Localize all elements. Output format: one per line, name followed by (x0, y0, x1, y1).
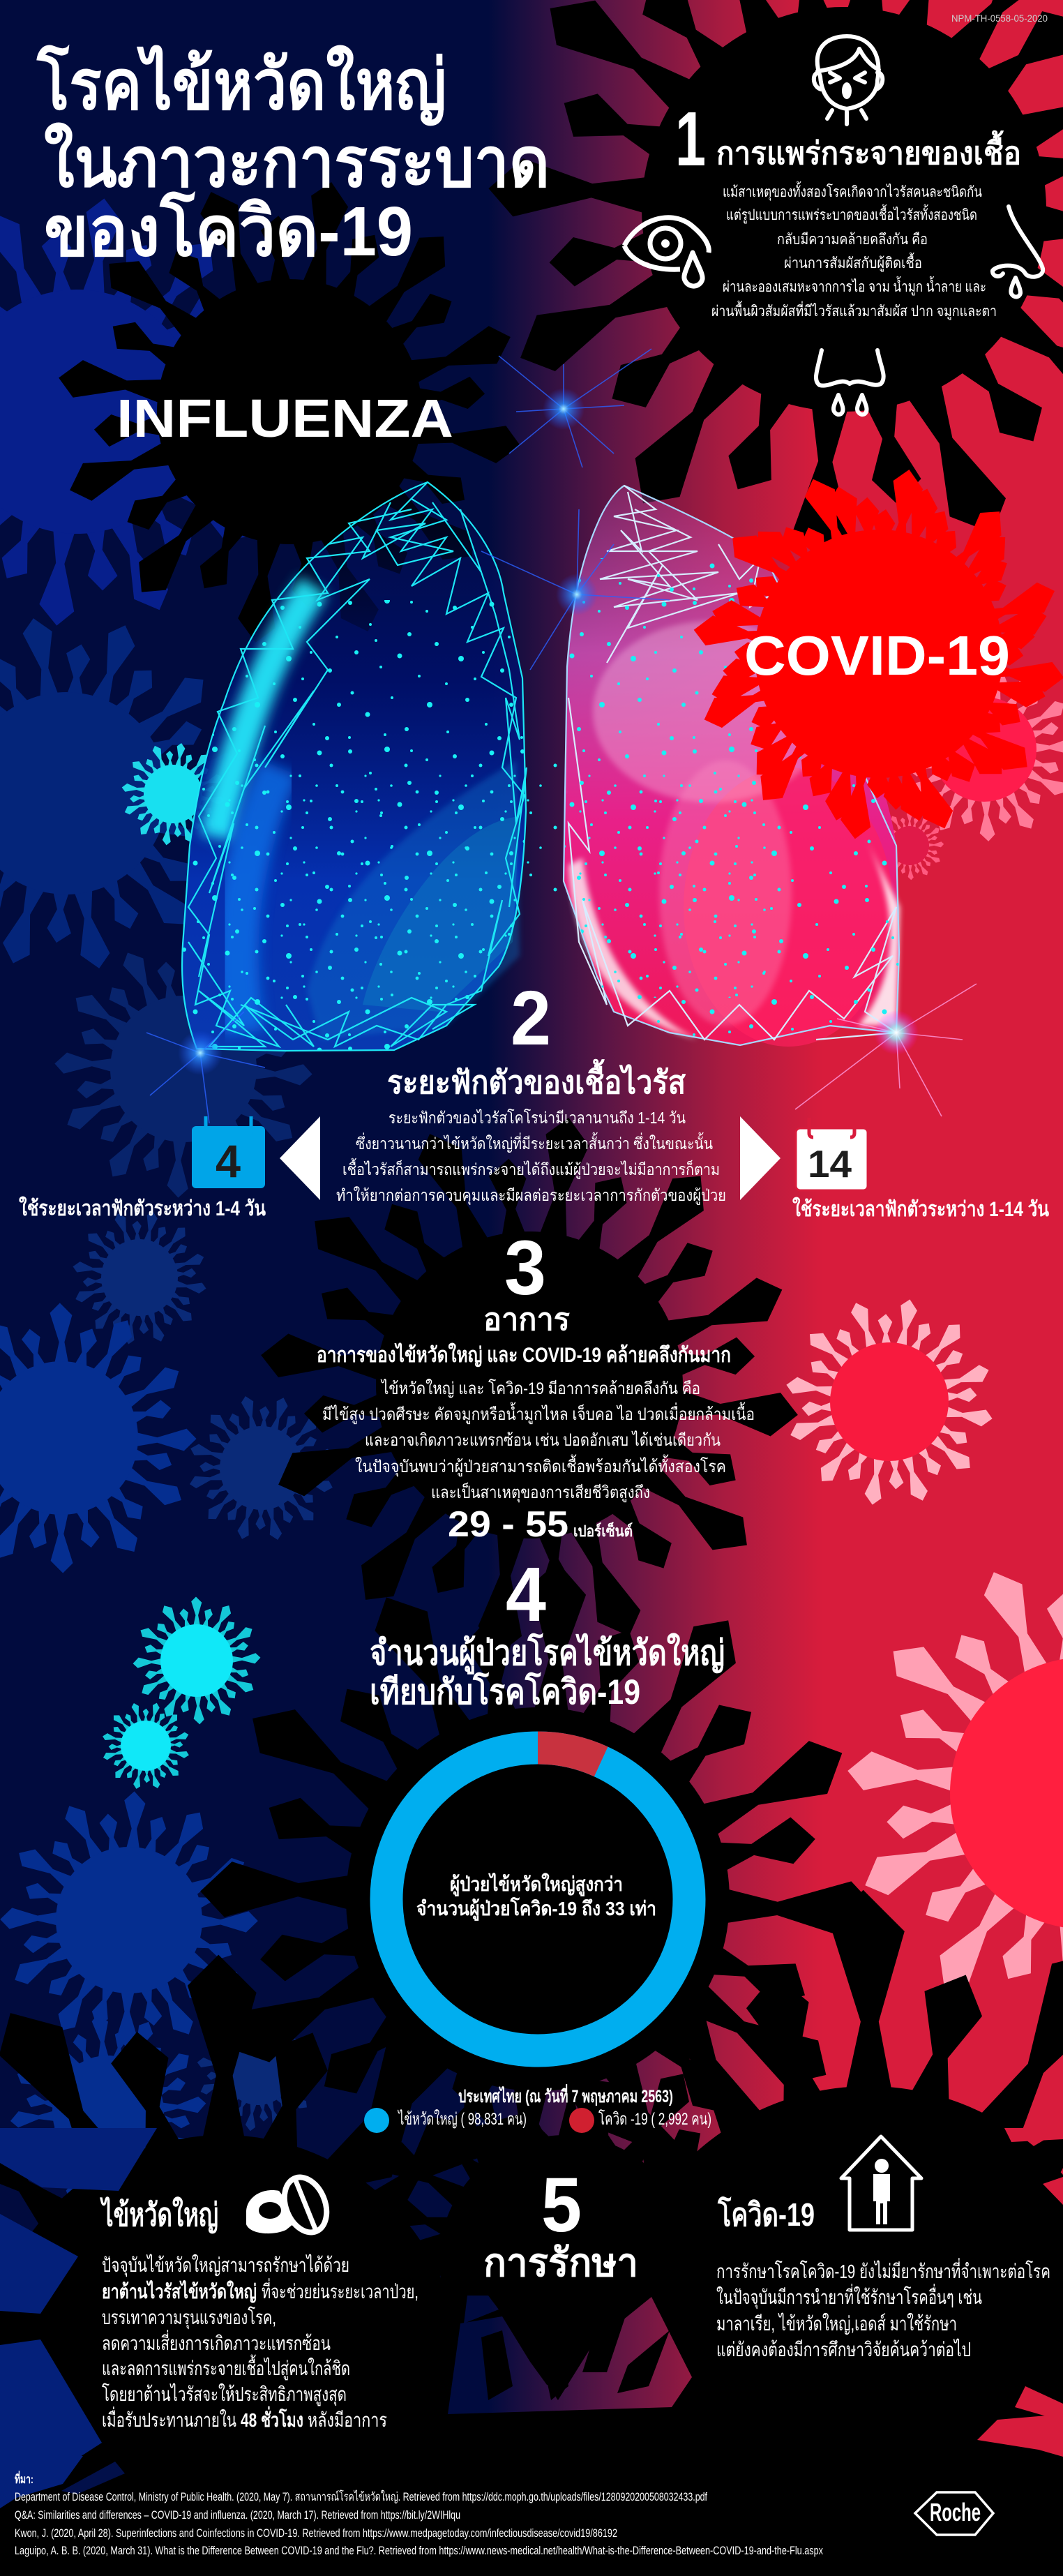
heading: symptoms: อาการ (483, 1303, 570, 1337)
icon: pills (246, 2171, 334, 2239)
arrow: left (280, 1116, 320, 1200)
text: influenza treatment: ยาต้านไวรัสไข้หวัดใหญ่ (102, 2280, 257, 2303)
subheading: covid treatment: โควิด-19 (717, 2196, 815, 2233)
text: influenza treatment: ที่จะช่วยย่นระยะเวลาป่วย, (262, 2278, 419, 2302)
text: transmission description: ผ่านละอองเสมหะจากการไอ จาม น้ำมูก น้ำลาย และ (723, 276, 986, 296)
subheading: influenza treatment: ไข้หวัดใหญ่ (99, 2196, 218, 2233)
heading: treatment: การรักษา (483, 2240, 638, 2284)
heading: incubation: ระยะฟักตัวของเชื้อไวรัส (387, 1058, 686, 1100)
caption: influenza incubation: ใช้ระยะเวลาฟักตัวระหว่าง 1-4 วัน (19, 1196, 266, 1220)
icon: calendar 4 days: 4 (216, 1135, 241, 1187)
legend: โควิด -19 ( 2,992 คน) (598, 2109, 711, 2129)
sources (15, 2471, 823, 2557)
arrow: right (740, 1116, 781, 1200)
text: influenza treatment: หลังมีอาการ (308, 2409, 387, 2431)
icon: stay at home (841, 2136, 921, 2230)
text: donut centre (416, 1873, 656, 1921)
title: ในภาวะการระบาด (44, 122, 550, 202)
title (36, 44, 550, 271)
lung: influenza (left, blue) (174, 482, 568, 1054)
text: transmission description: ผ่านพื้นผิวสัมผัสที่มีไวรัสแล้วมาสัมผัส ปาก จมูกและตา (711, 301, 997, 320)
panel: section 4 case comparison (364, 1552, 725, 2133)
sources: ที่มา: (15, 2471, 33, 2486)
background virus particles: cyan (91, 734, 261, 1800)
number: 3: 3 (504, 1225, 546, 1311)
sources: Department of Disease Control, Ministry of Public Health. (2020, May 7). สถานการณ์โรคไข้หวัดใหญ่. Retrieved from https://ddc.moph.go.th/uploads/files/1280920200508032433.pdf (15, 2489, 707, 2503)
text: influenza treatment: เมื่อรับประทานภายใน (102, 2406, 236, 2431)
sources: Q&A: Similarities and differences – COVID-19 and influenza. (2020, March 17). Retrieved from https://bit.ly/2WIHlqu (15, 2508, 460, 2522)
label: INFLUENZA: INFLUENZA (116, 389, 453, 449)
text: symptoms description: และเป็นสาเหตุของการเสียชีวิตสูงถึง (431, 1482, 650, 1503)
text: influenza treatment (102, 2254, 419, 2431)
icon: calendar 14 days (796, 1118, 868, 1190)
panel: section 5 treatment (99, 2136, 1050, 2431)
text: incubation description (336, 1109, 726, 1205)
background virus particles: red and pink (765, 657, 1063, 2064)
text: transmission description: แม้สาเหตุของทั้งสองโรคเกิดจากไวรัสคนละชนิดกัน (723, 181, 982, 201)
title: โรคไข้หวัดใหญ่ (36, 44, 446, 126)
title: ของโควิด-19 (44, 190, 413, 271)
heading: case comparison (370, 1632, 725, 1712)
logo: Roche (915, 2492, 993, 2535)
text: transmission description: กลับมีความคล้ายคลึงกัน คือ (777, 232, 928, 248)
text: symptoms description (322, 1379, 755, 1503)
text: covid treatment: มาลาเรีย, ไข้หวัดใหญ่,เอดส์ มาใช้รักษา (716, 2312, 957, 2335)
text: covid treatment: แต่ยังคงต้องมีการศึกษาวิจัยค้นคว้าต่อไป (716, 2339, 971, 2360)
heading: transmission: การแพร่กระจายของเชื้อ (716, 130, 1021, 171)
text: donut centre: จำนวนผู้ป่วยโควิด-19 ถึง 33 เท่า (416, 1896, 656, 1921)
text: influenza treatment: ลดความเสี่ยงการเกิดภาวะแทรกซ้อน (102, 2330, 331, 2354)
panel: section 1 transmission (624, 36, 1043, 414)
stat: 29-55 percent: 29 - 55 (448, 1504, 568, 1545)
logo: Roche: Roche (930, 2498, 981, 2526)
code: document number: NPM-TH-0558-05-2020 (951, 13, 1048, 24)
sources: Kwon, J. (2020, April 28). Superinfections and Coinfections in COVID-19. Retrieved from https://www.medpagetoday.com/infectiousdisease/covid19/86192 (15, 2526, 617, 2540)
icon: eye with tear (624, 218, 709, 286)
number: 1: 1 (675, 96, 706, 182)
icon: coughing face (814, 36, 882, 124)
icon: calendar 14 days: 14 (808, 1142, 852, 1185)
background virus particles: blue (0, 169, 354, 2242)
text: influenza treatment: บรรเทาความรุนแรงของโรค, (102, 2306, 276, 2330)
legend: ไข้หวัดใหญ่ ( 98,831 คน) (398, 2109, 527, 2129)
text: transmission description: ผ่านการสัมผัสกับผู้ติดเชื้อ (784, 253, 922, 272)
icon: nose side with drip (993, 207, 1043, 297)
label: COVID-19: COVID-19 (744, 624, 1010, 687)
text: transmission description: แต่รูปแบบการแพร่ระบาดของเชื้อไวรัสทั้งสองชนิด (726, 204, 977, 224)
text: symptoms description: ไข้หวัดใหญ่ และ โควิด-19 มีอาการคล้ายคลึงกัน คือ (380, 1379, 700, 1398)
donut chart (386, 1748, 689, 2051)
text: influenza treatment: ปัจจุบันไข้หวัดใหญ่สามารถรักษาได้ด้วย (102, 2254, 349, 2277)
number: 5: 5 (541, 2162, 582, 2248)
text: incubation description: เชื้อไวรัสก็สามารถแพร่กระจายได้ถึงแม้ผู้ป่วยจะไม่มีอาการก็ตาม (342, 1158, 720, 1179)
text: symptoms description: ในปัจจุบันพบว่าผู้ป่วยสามารถติดเชื้อพร้อมกันได้ทั้งสองโรค (355, 1454, 726, 1477)
number: 4: 4 (506, 1552, 546, 1638)
gaps showing background between bottom silhouettes (0, 2128, 1063, 2508)
heading: case comparison: เทียบกับโรคโควิด-19 (370, 1671, 640, 1712)
text: covid treatment (716, 2258, 1050, 2360)
text: donut centre: ผู้ป่วยไข้หวัดใหญ่สูงกว่า (450, 1873, 623, 1896)
number: 2: 2 (511, 975, 551, 1061)
icon: calendar 4 days (192, 1116, 265, 1188)
red virus: COVID-19 badge (662, 437, 1063, 871)
text: incubation description: ระยะฟักตัวของไวรัสโคโรน่ามีเวลานานถึง 1-14 วัน (389, 1109, 686, 1127)
legend: ประเทศไทย (ณ วันที่ 7 พฤษภาคม 2563) (458, 2084, 673, 2106)
panel: section 3 symptoms (317, 1225, 755, 1545)
text: incubation description: ซึ่งยาวนานกว่าไข้หวัดใหญ่ที่มีระยะเวลาสั้นกว่า ซึ่งในขณะนั้น (356, 1132, 713, 1153)
heading: case comparison: จำนวนผู้ป่วยโรคไข้หวัดใหญ่ (370, 1632, 725, 1675)
lung: COVID-19 (right, pink) (564, 486, 900, 1047)
legend (364, 2084, 711, 2133)
text: symptoms description: และอาจเกิดภาวะแทรกซ้อน เช่น ปอดอักเสบ ได้เช่นเดียวกัน (365, 1430, 721, 1450)
text: transmission description (711, 181, 997, 320)
icon: nose front with drops (816, 350, 884, 414)
subheading: symptoms: อาการของไข้หวัดใหญ่ และ COVID-19 คล้ายคลึงกันมาก (317, 1342, 731, 1368)
panel: section 2 incubation (19, 975, 1049, 1221)
text: incubation description: ทำให้ยากต่อการควบคุมและมีผลต่อระยะเวลาการกักตัวของผู้ป่วย (336, 1186, 726, 1205)
text: symptoms description: มีไข้สูง ปวดศีรษะ คัดจมูกหรือน้ำมูกไหล เจ็บคอ ไอ ปวดเมื่อยกล้ามเนื้อ (322, 1402, 755, 1425)
text: influenza treatment: 48 ชั่วโมง (241, 2406, 303, 2431)
text: influenza treatment: และลดการแพร่กระจายเชื้อไปสู่คนใกล้ชิด (102, 2354, 350, 2381)
text: influenza treatment: โดยยาต้านไวรัสจะให้ประสิทธิภาพสูงสุด (102, 2383, 347, 2406)
light flares (146, 349, 977, 1123)
stat: 29-55 percent: เปอร์เซ็นต์ (573, 1521, 633, 1540)
stat: 29-55 percent (448, 1504, 633, 1545)
